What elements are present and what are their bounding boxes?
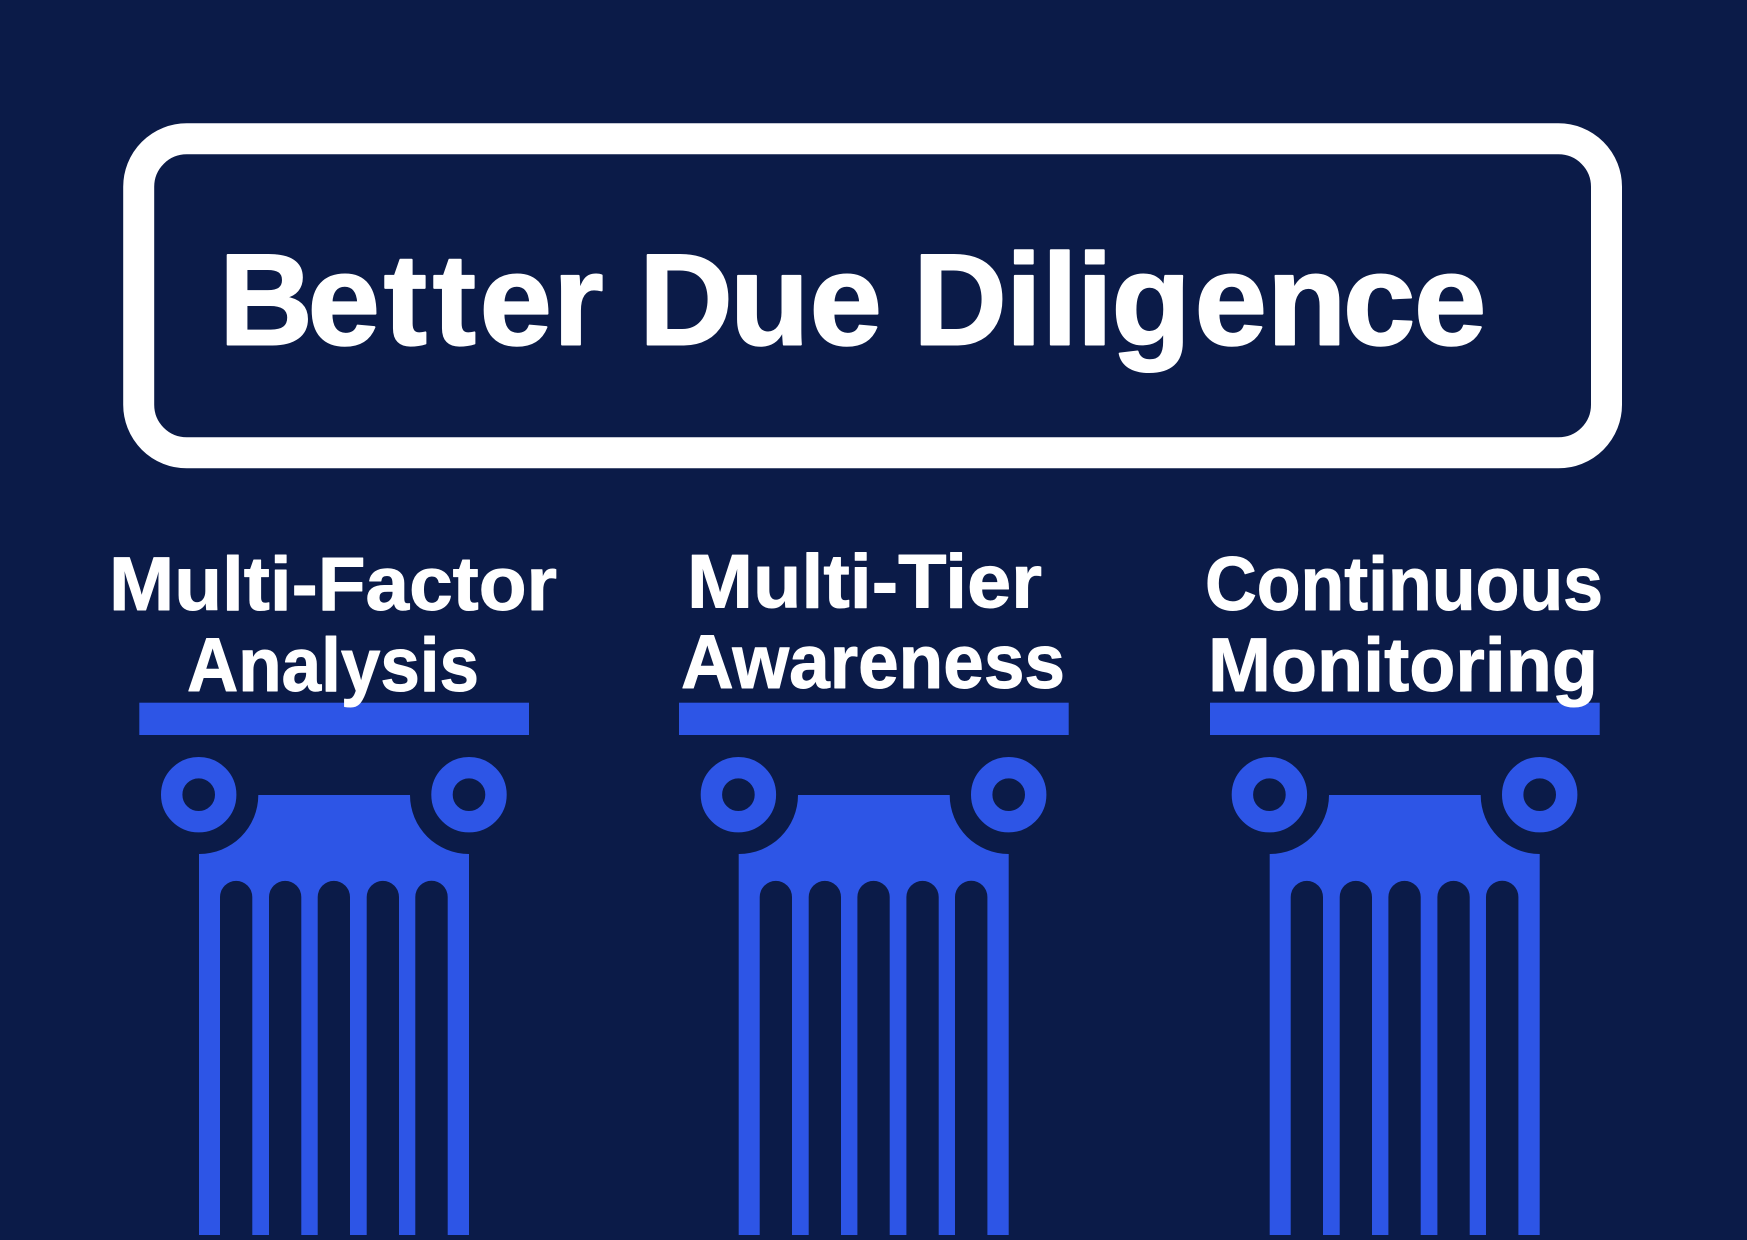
heading: multi-tier awareness: Multi-Tier <box>687 540 1042 624</box>
heading: continuous monitoring: Monitoring <box>1208 623 1598 708</box>
heading: multi-factor analysis: Analysis <box>187 623 479 708</box>
title: Better Due Diligence <box>0 226 1486 372</box>
pillar 3: continuous monitoring <box>1210 703 1600 1236</box>
panel: title box <box>0 139 1606 453</box>
pillar 1: multi-factor analysis <box>139 703 529 1236</box>
heading: multi-factor analysis: Multi-Factor <box>109 542 557 627</box>
heading: continuous monitoring: Continuous <box>1205 542 1603 627</box>
heading: multi-tier awareness: Awareness <box>681 620 1065 705</box>
pillar 2: multi-tier awareness <box>679 703 1069 1236</box>
